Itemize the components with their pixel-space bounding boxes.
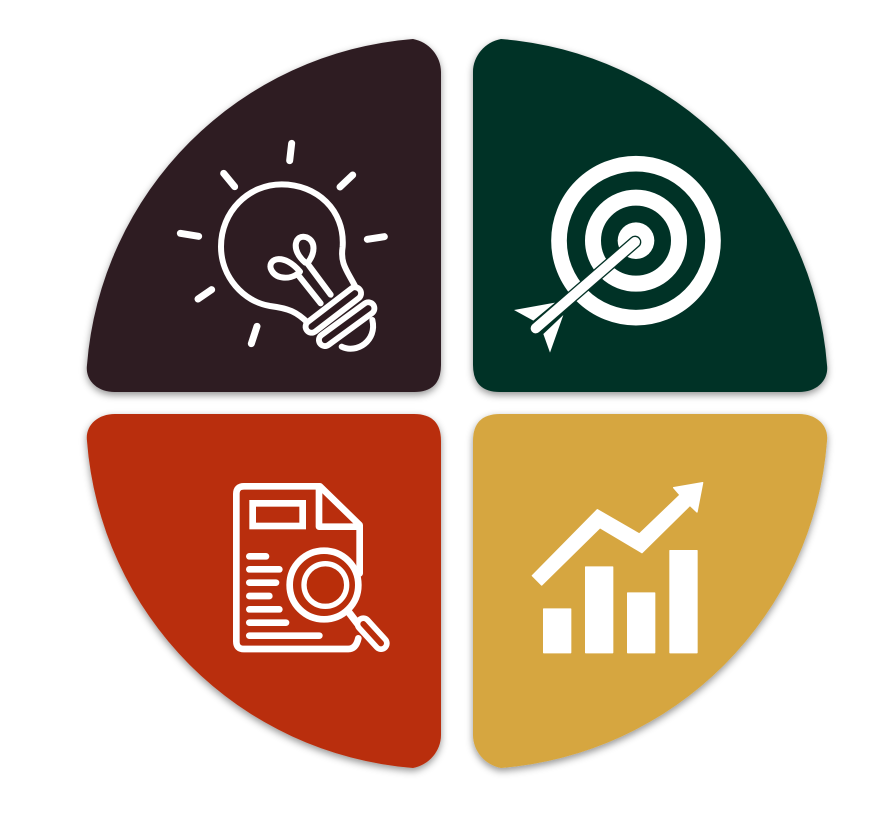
quadrant shape: dark plum <box>87 39 441 392</box>
panel: research <box>87 414 441 768</box>
icon: target with arrow <box>514 164 713 353</box>
quadrant shape: rust red <box>87 414 441 768</box>
quadrant shape: mustard gold <box>473 414 827 768</box>
panel: target <box>473 39 827 392</box>
panel: growth <box>473 414 827 768</box>
icon: light bulb <box>180 143 384 349</box>
icon: bar chart with rising arrow <box>532 483 703 653</box>
quadrant shape: dark green <box>473 39 827 392</box>
icon: document with magnifier <box>236 486 381 649</box>
panel: idea <box>87 39 441 392</box>
